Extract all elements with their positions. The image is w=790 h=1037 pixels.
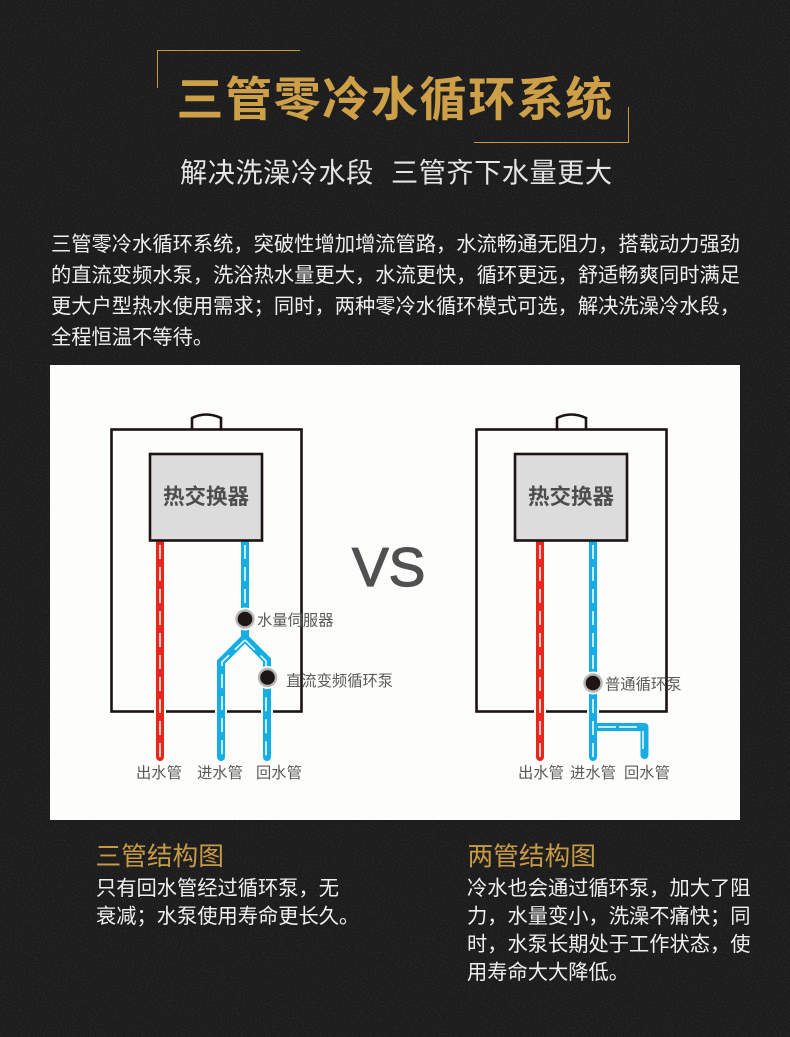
pipe labels: 进水管 (570, 765, 616, 782)
caption body: 只有回水管经过循环泵，无 (96, 877, 339, 900)
DC inverter pump (256, 666, 393, 690)
heat exchanger: 热交换器 (528, 484, 614, 509)
intro paragraph: 三管零冷水循环系统，突破性增加增流管路，水流畅通无阻力，搭载动力强劲 (51, 233, 740, 256)
subtitle: 解决洗澡冷水段 (180, 157, 374, 188)
water servo valve (234, 608, 334, 630)
pipe labels: 出水管 (518, 765, 564, 782)
water servo valve: 水量伺服器 (257, 612, 334, 630)
panel: comparison diagram (50, 365, 740, 820)
VS label: VS (352, 536, 425, 598)
heater body (476, 414, 666, 712)
pipe: inlet and return (blue) (593, 541, 644, 757)
caption body: 用寿命大大降低。 (467, 961, 629, 984)
caption heading: 两管结构图 (468, 842, 596, 871)
intro paragraph: 的直流变频水泵，洗浴热水量更大，水流更快，循环更远，舒适畅爽同时满足 (51, 264, 740, 287)
caption body (467, 877, 751, 984)
pipe labels: 回水管 (256, 765, 302, 782)
caption: three-pipe (96, 842, 359, 928)
caption body: 时，水泵长期处于工作状态，使 (467, 933, 751, 956)
heat exchanger: 热交换器 (163, 484, 249, 509)
pipe labels: 回水管 (624, 765, 670, 782)
caption body: 衰减；水泵使用寿命更长久。 (96, 905, 359, 928)
heat exchanger (515, 454, 627, 540)
standard circulation pump: 普通循环泵 (605, 676, 682, 694)
standard circulation pump (582, 672, 682, 694)
intro paragraph: 更大户型热水使用需求；同时，两种零冷水循环模式可选，解决洗澡冷水段， (51, 295, 740, 318)
title: 三管零冷水循环系统 (176, 73, 614, 126)
pipe labels: 出水管 (136, 765, 182, 782)
pipe labels: 进水管 (197, 765, 243, 782)
pipe: outlet (red) (534, 541, 546, 757)
title frame: top-left corner bracket (158, 50, 300, 88)
title frame: bottom-right corner bracket (474, 107, 628, 142)
heat exchanger (150, 454, 262, 540)
intro paragraph (51, 233, 740, 349)
subtitle: 三管齐下水量更大 (391, 157, 613, 188)
caption: two-pipe (467, 842, 751, 984)
intro paragraph: 全程恒温不等待。 (51, 326, 213, 349)
diagram: three-pipe structure (112, 414, 393, 782)
pipe labels (518, 765, 670, 782)
caption heading: 三管结构图 (96, 842, 224, 871)
caption body (96, 877, 359, 928)
heater body (112, 414, 302, 712)
DC inverter pump: 直流变频循环泵 (286, 673, 393, 690)
pipe: inlet and return (blue) (221, 542, 267, 757)
caption body: 力，水量变小，洗澡不痛快；同 (467, 905, 751, 928)
pipe labels (136, 765, 302, 782)
pipe: outlet (red) (154, 541, 166, 757)
diagram: two-pipe structure (476, 414, 682, 782)
caption body: 冷水也会通过循环泵，加大了阻 (467, 877, 751, 900)
